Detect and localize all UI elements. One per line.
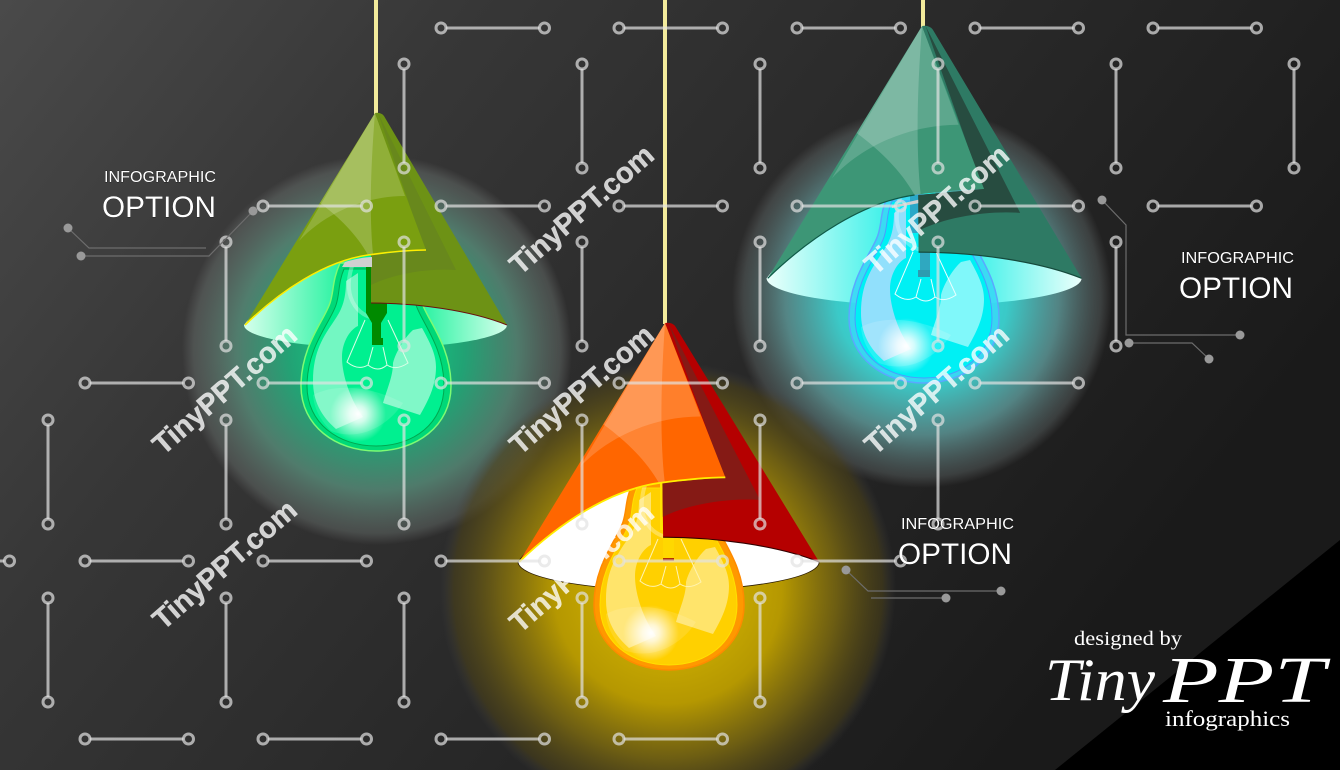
glow: cyan bbox=[732, 108, 1112, 488]
label: right option: OPTION bbox=[1179, 272, 1293, 305]
logo: designed by TinyPPT infographics: PPT bbox=[1162, 644, 1331, 717]
shade interior: green bbox=[244, 253, 507, 348]
label: bottom option: INFOGRAPHIC bbox=[901, 516, 1014, 533]
cord: teal lamp bbox=[921, 0, 925, 27]
shade exterior: green bbox=[245, 113, 507, 325]
label: left option bbox=[102, 169, 216, 224]
bulb: yellow bbox=[594, 482, 744, 670]
watermarks: TinyPPT.com bbox=[504, 319, 661, 461]
bulb: green bbox=[301, 261, 451, 451]
logo: designed by TinyPPT infographics: infographics bbox=[1165, 706, 1290, 731]
logo: designed by TinyPPT infographics bbox=[1045, 628, 1331, 731]
black corner triangle bbox=[1055, 540, 1340, 770]
lamp: green bbox=[244, 113, 507, 451]
cord: green lamp bbox=[374, 0, 378, 114]
connector: left option bbox=[64, 206, 258, 260]
shade exterior: orange bbox=[516, 323, 819, 562]
lamp: orange bbox=[516, 323, 820, 670]
glow: green bbox=[182, 155, 572, 545]
label: bottom option bbox=[898, 516, 1014, 571]
connector: bottom option bbox=[842, 566, 1006, 602]
logo: designed by TinyPPT infographics: designed by bbox=[1074, 628, 1182, 650]
shade interior: orange bbox=[517, 481, 820, 590]
logo: designed by TinyPPT infographics: Tiny bbox=[1045, 647, 1155, 713]
watermarks bbox=[147, 139, 1016, 639]
watermarks: TinyPPT.com bbox=[504, 497, 661, 639]
label: right option: INFOGRAPHIC bbox=[1181, 250, 1294, 267]
connector: right option bbox=[1098, 196, 1244, 364]
label: left option: INFOGRAPHIC bbox=[104, 169, 216, 186]
label: left option: OPTION bbox=[102, 191, 216, 224]
watermarks: TinyPPT.com bbox=[859, 139, 1016, 281]
shade exterior: teal bbox=[766, 26, 1082, 278]
glow: yellow bbox=[440, 362, 896, 770]
bulb: cyan bbox=[849, 195, 999, 383]
watermarks: TinyPPT.com bbox=[147, 319, 304, 461]
label: right option bbox=[1179, 250, 1294, 305]
cord: orange lamp bbox=[663, 0, 667, 324]
watermarks: TinyPPT.com bbox=[147, 494, 304, 636]
label: bottom option: OPTION bbox=[898, 538, 1012, 571]
watermarks: TinyPPT.com bbox=[859, 319, 1016, 461]
lamp: teal bbox=[766, 26, 1082, 383]
watermarks: TinyPPT.com bbox=[504, 139, 661, 281]
shade interior: teal bbox=[766, 193, 1082, 306]
